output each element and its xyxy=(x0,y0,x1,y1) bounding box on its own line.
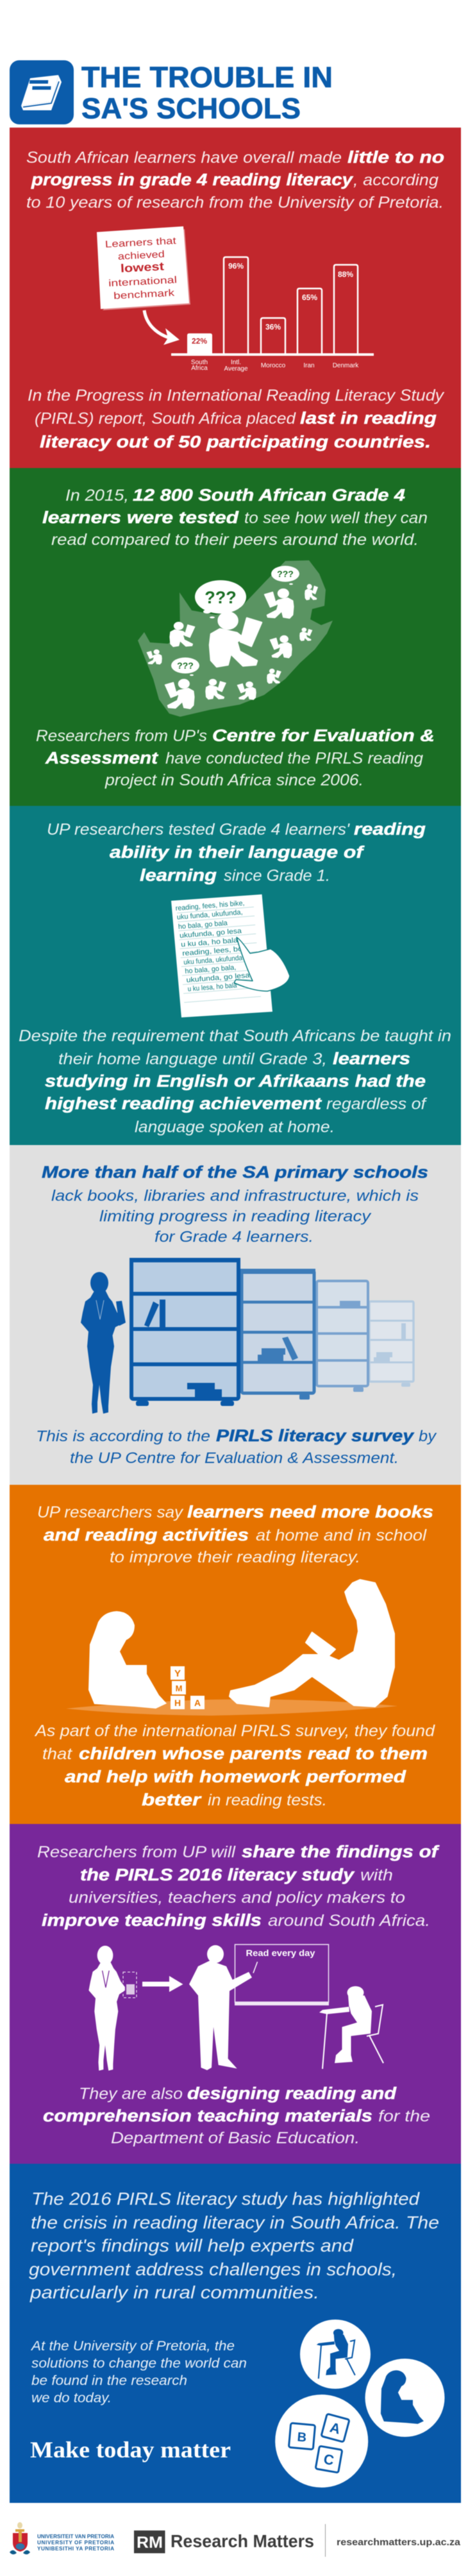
icon: main reader xyxy=(210,612,262,667)
bar chart: lowest benchmark by country: 96% xyxy=(228,262,244,271)
text block: more than half of schools: for Grade 4 learners. xyxy=(155,1228,313,1246)
icon: thought bubbles xyxy=(171,565,299,676)
text block: English or Afrikaans xyxy=(19,1027,451,1136)
bar chart: lowest benchmark by country: 36% xyxy=(265,322,281,331)
illustration: test paper with hand: reading, lees, bo xyxy=(182,945,243,958)
bar chart: lowest benchmark by country: 65% xyxy=(302,293,317,302)
text block: University of Pretoria solutions: solutions to change the world can xyxy=(31,2356,247,2371)
footer logo: Research Matters: Research Matters xyxy=(171,2531,314,2551)
callout: learners note: Learners that xyxy=(104,235,177,250)
illustration: shelf 2 xyxy=(240,1269,315,1400)
icon: alphabet blocks: H xyxy=(174,1698,181,1708)
text block: little to no progress: South African learners have overall made xyxy=(26,149,342,167)
title: SA'S SCHOOLS xyxy=(81,92,301,124)
text block: more than half of schools xyxy=(42,1162,428,1246)
panel: purple sharing findings xyxy=(10,1824,461,2164)
text block: English or Afrikaans: regardless of xyxy=(326,1095,428,1113)
icon: circle with alphabet blocks: C xyxy=(322,2451,335,2468)
footer logo: University of Pretoria crest xyxy=(10,2522,30,2554)
text block: more than half of schools: limiting progress in reading literacy xyxy=(99,1208,372,1225)
illustration: shelf 1 with few books xyxy=(130,1258,240,1406)
text block: reading ability: UP researchers tested Grade 4 learners' xyxy=(47,821,350,839)
icon: circle with girl xyxy=(365,2359,445,2437)
bar chart: lowest benchmark by country: South xyxy=(191,359,208,366)
text block: PIRLS placed last: (PIRLS) report, South Africa placed xyxy=(35,410,296,428)
text block: PIRLS placed last: In the Progress in International Reading Literacy Study xyxy=(28,387,445,405)
footer text: University of Pretoria names: UNIVERSITEIT VAN PRETORIA xyxy=(37,2534,114,2539)
text block: University of Pretoria solutions: we do today. xyxy=(31,2391,112,2405)
illustration: test paper with hand xyxy=(171,894,290,1017)
text block: parents read to them: and help with homework performed xyxy=(65,1768,407,1786)
icon: circle with alphabet blocks: A xyxy=(328,2419,342,2438)
text block: need more books: at home and in school xyxy=(256,1526,428,1544)
text block: reading ability xyxy=(47,821,426,885)
text block: University of Pretoria solutions: At the University of Pretoria, the xyxy=(30,2339,235,2354)
text block: little to no progress: little to no xyxy=(347,149,444,167)
text block: crisis in reading literacy xyxy=(29,2189,439,2302)
footer logo: Research Matters xyxy=(134,2530,314,2553)
icon: researcher silhouette with report xyxy=(88,1946,137,2071)
text block: designing materials: designing reading and xyxy=(187,2085,397,2103)
text block: 12 800 learners tested: 12 800 South African Grade 4 xyxy=(133,487,405,505)
text block: little to no progress: to 10 years of research from the University of Pretoria. xyxy=(26,194,444,212)
bar chart: lowest benchmark by country: Africa xyxy=(191,365,208,372)
text block: share the findings xyxy=(37,1843,440,1930)
illustration: test paper with hand: ukufunda, go lesa xyxy=(180,927,242,940)
text block: parents read to them: in reading tests. xyxy=(208,1791,327,1809)
text block: English or Afrikaans: Despite the requirement that South Africans be taught in xyxy=(19,1027,451,1045)
slogan: Make today matter xyxy=(30,2437,231,2463)
icon: alphabet blocks: M xyxy=(176,1684,182,1693)
illustration: test paper with hand: reading, fees, his bike, xyxy=(175,899,245,912)
text block: PIRLS literacy survey xyxy=(36,1426,437,1467)
icon: circle with alphabet blocks: B xyxy=(297,2430,307,2445)
text block: share the findings: around South Africa. xyxy=(268,1912,430,1930)
illustration: test paper with hand: uku funda, ukufunda, xyxy=(176,908,243,921)
illustration: test paper with hand: u ku lesa, ho bala xyxy=(187,982,238,993)
map: South Africa with readers xyxy=(138,560,333,717)
text block: Centre for Evaluation and Assessment: Assessment xyxy=(45,749,159,767)
text block: Centre for Evaluation and Assessment: have conducted the PIRLS reading xyxy=(165,749,423,767)
text block: 12 800 learners tested: read compared to their peers around the world. xyxy=(51,531,419,549)
illustration: shelf 3 xyxy=(315,1281,369,1392)
icon: alphabet blocks: Y xyxy=(174,1668,181,1679)
text block: parents read to them: As part of the international PIRLS survey, they found xyxy=(34,1722,435,1740)
icon: parent silhouette reading xyxy=(230,1580,394,1707)
title xyxy=(81,61,333,124)
text block: crisis in reading literacy: report's findings will help experts and xyxy=(31,2236,355,2255)
footer text: University of Pretoria names: UNIVERSITY OF PRETORIA xyxy=(37,2540,114,2545)
text block: need more books xyxy=(37,1503,433,1566)
text block: little to no progress: , according xyxy=(353,171,439,189)
text block: parents read to them xyxy=(34,1722,435,1809)
arrow: researcher to teacher xyxy=(142,1976,183,1992)
callout: learners note xyxy=(97,226,190,310)
illustration: test paper with hand: u ku da, ho bala xyxy=(181,937,238,949)
footer url: researchmatters.up.ac.za xyxy=(337,2537,461,2548)
footer logo: Research Matters: RM xyxy=(137,2534,163,2552)
text block: English or Afrikaans: their home language until Grade 3, xyxy=(58,1050,327,1068)
text block: English or Afrikaans: learners xyxy=(333,1050,410,1068)
icon: teacher at whiteboard: Read every day xyxy=(246,1948,315,1958)
text block: PIRLS placed last: literacy out of 50 participating countries. xyxy=(40,433,431,451)
text block: share the findings: with xyxy=(360,1866,393,1884)
bar chart: lowest benchmark by country: Iran xyxy=(303,362,315,369)
text block: designing materials: Department of Basic Education. xyxy=(111,2129,360,2147)
bar chart: lowest benchmark by country: 22% xyxy=(192,337,207,346)
bar chart: lowest benchmark by country: Intl. xyxy=(231,359,241,366)
text block: parents read to them: children whose parents read to them xyxy=(79,1745,428,1763)
illustration: test paper with hand: ho bala, go bala, xyxy=(185,964,237,975)
panel: green tested learners xyxy=(10,468,461,806)
text block: reading ability: ability in their language of xyxy=(110,844,365,862)
text block: PIRLS literacy survey: by xyxy=(419,1428,437,1445)
callout: learners note: achieved xyxy=(117,249,165,262)
text block: PIRLS literacy survey: PIRLS literacy survey xyxy=(216,1426,415,1445)
icon: thought bubbles: ??? xyxy=(177,660,194,671)
text block: Centre for Evaluation and Assessment xyxy=(36,727,435,789)
text block: share the findings: share the findings of xyxy=(242,1843,440,1861)
icon: teacher at whiteboard xyxy=(189,1945,329,2070)
text block: more than half of schools: lack books, libraries and infrastructure, which is xyxy=(51,1187,419,1205)
callout: learners note: lowest xyxy=(120,260,164,275)
text block: crisis in reading literacy: particularly in rural communities. xyxy=(29,2282,319,2302)
panel: teal language of learning xyxy=(10,806,461,1145)
panel: orange reading at home xyxy=(10,1485,461,1824)
bar chart: lowest benchmark by country: Denmark xyxy=(333,362,359,369)
text block: little to no progress: progress in grade 4 reading literacy xyxy=(31,171,354,189)
illustration: test paper with hand: uku funda, ukufunda xyxy=(183,954,243,966)
text block: share the findings: improve teaching skills xyxy=(42,1912,262,1930)
text block: designing materials: They are also xyxy=(79,2085,183,2103)
text block: Centre for Evaluation and Assessment: Centre for Evaluation & xyxy=(212,727,435,745)
text block: 12 800 learners tested: learners were tested xyxy=(42,509,240,527)
text block: English or Afrikaans: language spoken at home. xyxy=(135,1118,335,1136)
text block: designing materials xyxy=(43,2085,430,2147)
text block: need more books: to improve their reading literacy. xyxy=(110,1548,360,1566)
icon: student at desk xyxy=(319,1986,383,2069)
icon: thought bubbles: ??? xyxy=(205,588,237,607)
title: THE TROUBLE IN xyxy=(81,61,333,94)
text block: Centre for Evaluation and Assessment: Researchers from UP's xyxy=(36,727,207,745)
icon: thought bubbles: ??? xyxy=(277,569,294,579)
arrow: note to South Africa bar xyxy=(144,310,180,345)
text block: PIRLS placed last xyxy=(28,387,445,451)
text block: English or Afrikaans: highest reading achievement xyxy=(45,1095,322,1113)
text block: reading ability: learning xyxy=(140,867,217,885)
illustration: test paper with hand: ho bala, go bala xyxy=(178,919,228,931)
text block: need more books: learners need more books xyxy=(187,1503,433,1521)
icon: alphabet blocks xyxy=(171,1666,205,1709)
text block: University of Pretoria solutions xyxy=(30,2339,247,2405)
callout: learners note: international xyxy=(108,274,177,289)
icon: book in blue rounded square xyxy=(10,60,74,124)
panel: blue conclusion xyxy=(10,2164,461,2503)
bar chart: lowest benchmark by country: Average xyxy=(224,365,248,372)
bar chart: lowest benchmark by country: Morocco xyxy=(261,362,286,369)
bar chart: lowest benchmark by country xyxy=(171,257,374,372)
text block: crisis in reading literacy: government address challenges in schools, xyxy=(29,2259,397,2279)
icon: woman silhouette xyxy=(81,1272,126,1414)
text block: reading ability: since Grade 1. xyxy=(224,867,330,885)
text block: 12 800 learners tested: to see how well they can xyxy=(244,509,428,527)
text block: designing materials: comprehension teaching materials xyxy=(43,2107,372,2125)
text block: parents read to them: that xyxy=(42,1745,72,1763)
text block: crisis in reading literacy: the crisis in reading literacy in South Africa. The xyxy=(31,2212,439,2232)
icon: circle with alphabet blocks xyxy=(275,2395,368,2488)
illustration: shelf 4 faded xyxy=(369,1301,414,1387)
text block: PIRLS literacy survey: This is according to the xyxy=(36,1428,210,1445)
icon: circle with student xyxy=(300,2320,371,2389)
text block: need more books: UP researchers say xyxy=(37,1503,184,1521)
icon: other readers xyxy=(147,584,318,708)
text block: English or Afrikaans: studying in English or Afrikaans had the xyxy=(45,1073,426,1091)
text block: need more books: and reading activities xyxy=(44,1526,249,1544)
illustration: test paper with hand: ukufunda, go lesa xyxy=(186,971,251,984)
text block: share the findings: the PIRLS 2016 literacy study xyxy=(80,1866,355,1884)
text block: University of Pretoria solutions: be found in the research xyxy=(31,2373,187,2388)
text block: 12 800 learners tested: In 2015, xyxy=(65,487,129,505)
text block: little to no progress xyxy=(26,149,444,212)
text block: Centre for Evaluation and Assessment: project in South Africa since 2006. xyxy=(104,771,364,789)
callout: learners note: benchmark xyxy=(113,287,175,301)
footer text: University of Pretoria names: YUNIBESITHI YA PRETORIA xyxy=(37,2546,114,2552)
panel: grey lack of resources xyxy=(10,1145,461,1485)
text block: share the findings: universities, teachers and policy makers to xyxy=(69,1889,405,1907)
footer text: University of Pretoria names xyxy=(37,2534,114,2552)
text block: crisis in reading literacy: The 2016 PIRLS literacy study has highlighted xyxy=(31,2189,421,2209)
text block: parents read to them: better xyxy=(142,1791,203,1809)
icon: alphabet blocks: A xyxy=(194,1698,201,1708)
bar chart: lowest benchmark by country: 88% xyxy=(338,270,353,279)
icon: girl silhouette xyxy=(88,1611,167,1709)
text block: PIRLS placed last: last in reading xyxy=(300,410,437,428)
illustration: child and parent reading xyxy=(66,1580,397,1716)
text block: share the findings: Researchers from UP will xyxy=(37,1843,237,1861)
text block: more than half of schools: More than half of the SA primary schools xyxy=(42,1162,428,1182)
text block: designing materials: for the xyxy=(378,2107,430,2125)
panel: red reading progress xyxy=(10,128,461,468)
text block: PIRLS literacy survey: the UP Centre for Evaluation & Assessment. xyxy=(70,1450,399,1467)
text block: reading ability: reading xyxy=(354,821,426,839)
text block: 12 800 learners tested xyxy=(42,487,428,549)
